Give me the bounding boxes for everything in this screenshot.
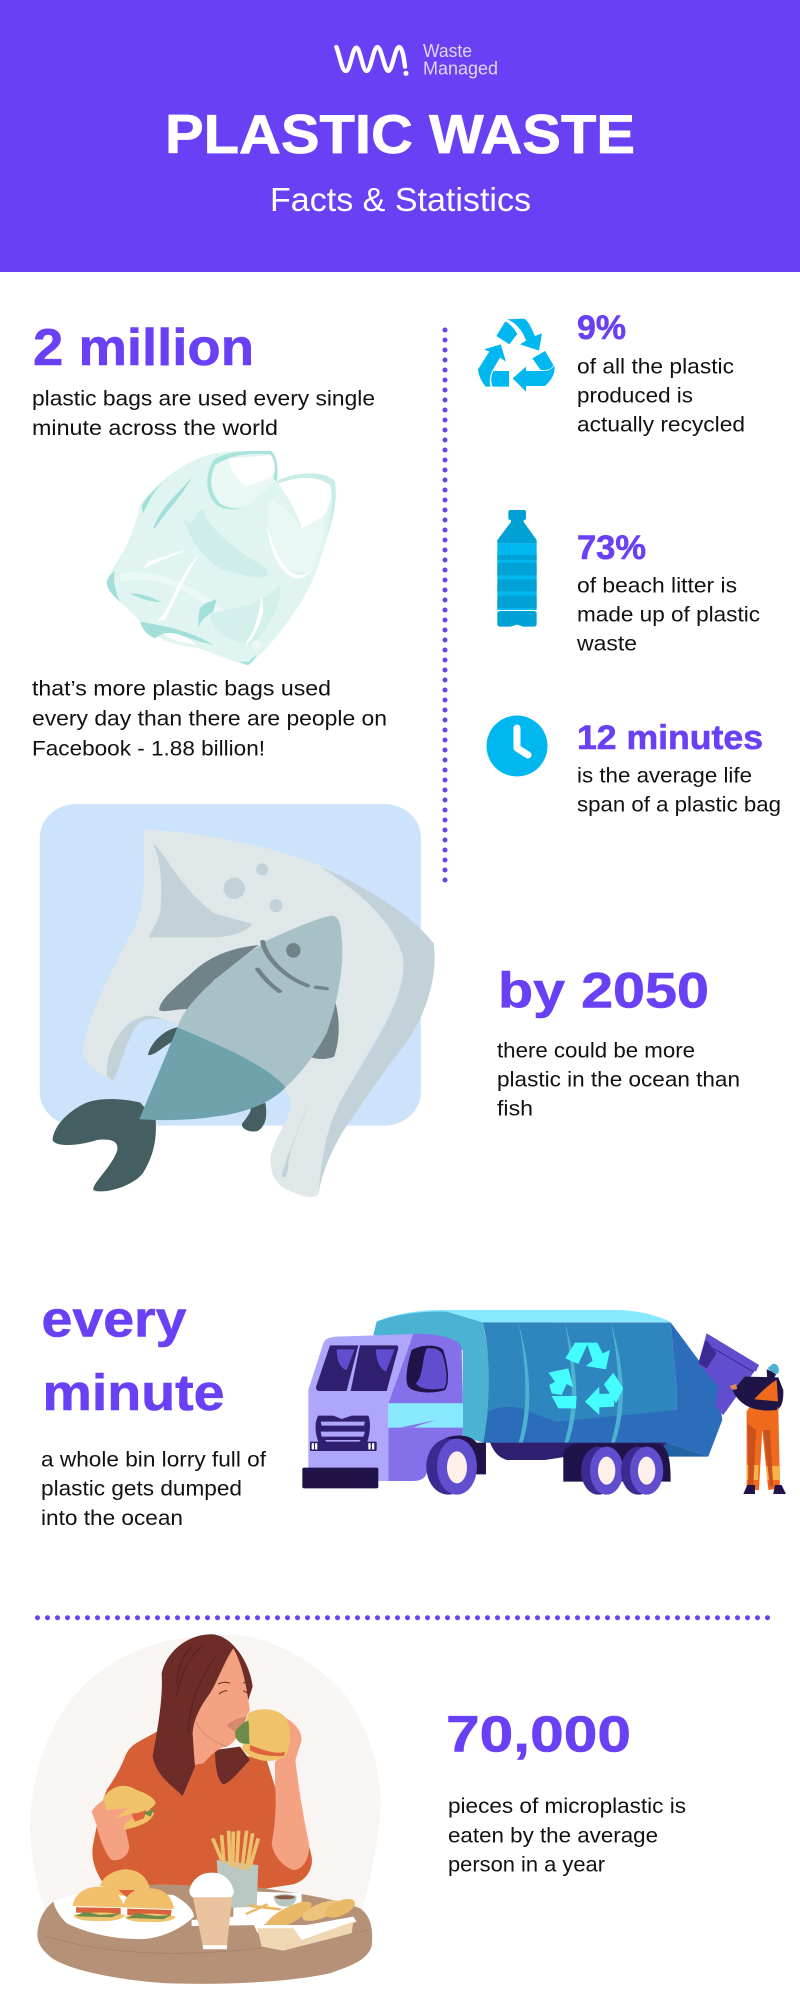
- stat: every minute: [41, 1290, 266, 1530]
- stat: 9%: [577, 309, 745, 436]
- stat: every minute: plastic gets dumped: [41, 1476, 242, 1500]
- header panel: [0, 0, 800, 272]
- text: Facebook comparison: Facebook - 1.88 billion!: [32, 736, 265, 760]
- stat: 12 minutes: span of a plastic bag: [577, 792, 781, 816]
- stat: 70,000: pieces of microplastic is: [448, 1794, 686, 1818]
- stat: 2 million: plastic bags are used every single: [32, 386, 375, 410]
- stat: 12 minutes: is the average life: [577, 764, 752, 788]
- stat: every minute: minute: [42, 1364, 225, 1421]
- subtitle: Facts & Statistics: [270, 181, 531, 218]
- text: Facebook comparison: [32, 676, 387, 760]
- stat: by 2050: [497, 962, 740, 1120]
- stat: by 2050: plastic in the ocean than: [497, 1068, 740, 1092]
- stat: 2 million: [32, 319, 375, 440]
- logo: Waste Managed: Waste: [423, 40, 472, 61]
- stat: 73%: made up of plastic: [577, 602, 760, 626]
- stat: 73%: waste: [576, 632, 637, 656]
- icon: clock: [486, 716, 548, 776]
- stat: 70,000: 70,000: [446, 1706, 631, 1762]
- stat: 70,000: [446, 1706, 686, 1876]
- stat: every minute: every: [42, 1290, 187, 1348]
- illustration: bin lorry and worker: [302, 1310, 786, 1495]
- text: Facebook comparison: every day than there are people on: [32, 706, 387, 730]
- illustration: plastic bag: [107, 451, 336, 665]
- stat: 70,000: eaten by the average: [448, 1824, 658, 1848]
- logo: Waste Managed: [336, 40, 498, 78]
- stat: 73%: 73%: [577, 529, 646, 567]
- stat: 70,000: person in a year: [448, 1852, 605, 1876]
- logo: Waste Managed: Managed: [423, 58, 498, 78]
- icon: bottle: [497, 510, 537, 627]
- stat: every minute: into the ocean: [41, 1506, 183, 1530]
- stat: 9%: produced is: [577, 384, 693, 408]
- stat: 9%: of all the plastic: [577, 354, 734, 378]
- text: Facebook comparison: that’s more plastic bags used: [32, 676, 331, 700]
- stat: 9%: actually recycled: [577, 412, 745, 436]
- title: PLASTIC WASTE: [165, 103, 635, 165]
- illustration: woman eating burgers: [30, 1634, 381, 1984]
- stat: by 2050: fish: [497, 1096, 533, 1120]
- stat: 12 minutes: 12 minutes: [577, 719, 763, 757]
- icon: recycle: [478, 319, 555, 392]
- stat: 73%: [576, 529, 760, 656]
- stat: 12 minutes: [577, 719, 781, 816]
- stat: by 2050: there could be more: [497, 1038, 695, 1062]
- stat: 73%: of beach litter is: [577, 574, 737, 598]
- stat: 2 million: minute across the world: [32, 416, 278, 440]
- stat: 2 million: 2 million: [33, 319, 254, 377]
- stat: every minute: a whole bin lorry full of: [41, 1448, 266, 1472]
- worker with bin: [698, 1333, 786, 1494]
- stat: 9%: 9%: [577, 309, 626, 347]
- illustration: fish in plastic bag: [40, 804, 435, 1197]
- stat: by 2050: by 2050: [498, 962, 709, 1018]
